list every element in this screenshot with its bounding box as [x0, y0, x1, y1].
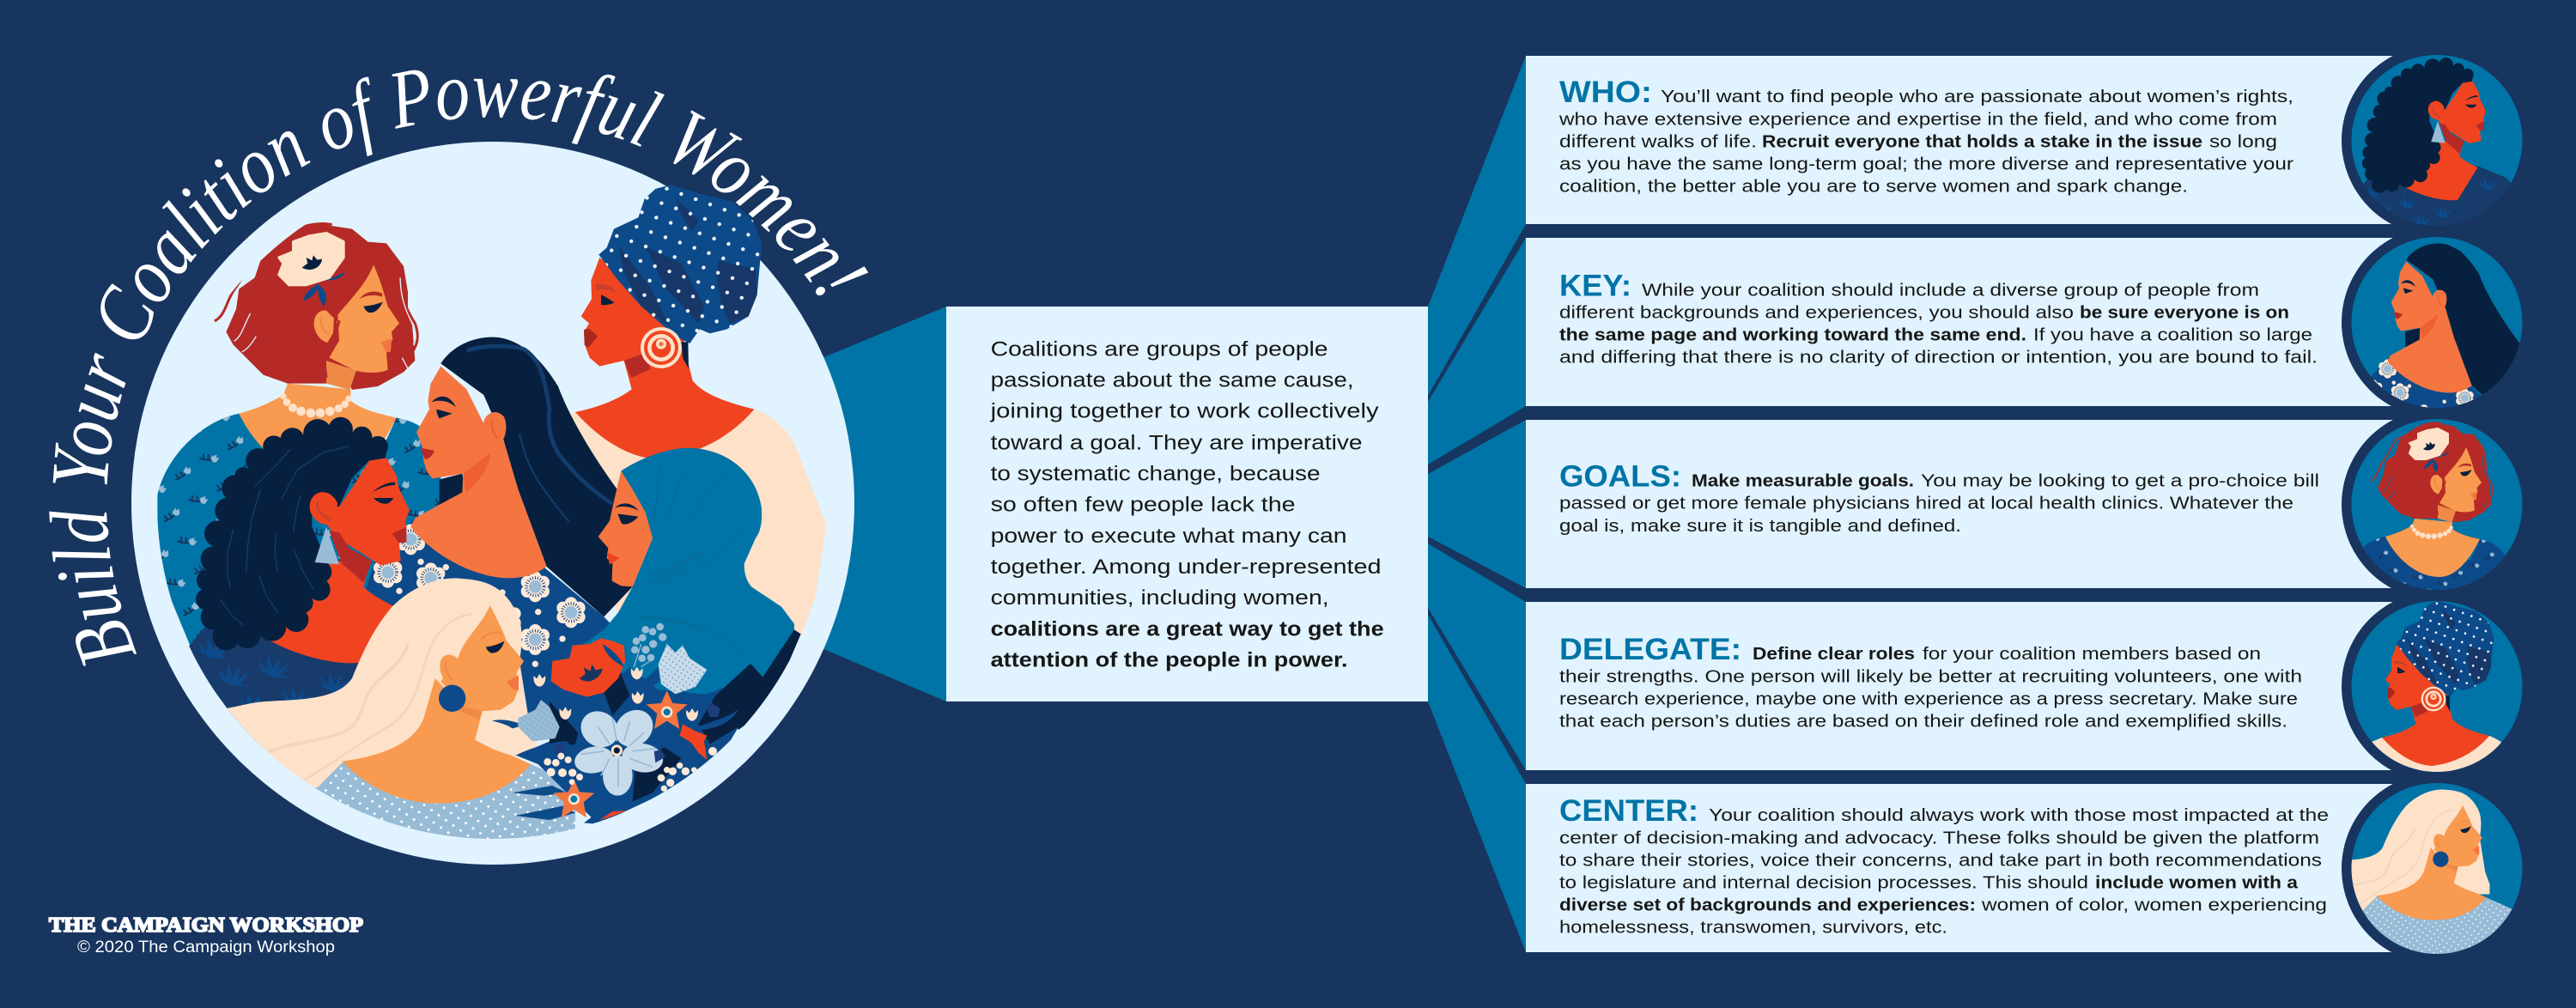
woman with blonde hair — [227, 578, 575, 839]
woman with turban — [558, 185, 826, 635]
intro text box: so often few people lack the — [991, 494, 1296, 517]
panel: CENTER: center of decision-making and advocacy. These folks should be given the platform — [1559, 829, 2319, 847]
small buds — [533, 667, 698, 721]
intro text box: to systematic change, because — [991, 462, 1321, 485]
panel: KEY: and differing that there is no clarity of direction or intention, you are bound to fail. — [1559, 349, 2318, 367]
intro text box: joining together to work collectively — [989, 400, 1379, 423]
intro text box: power to execute what many can — [991, 525, 1347, 548]
panel: DELEGATE: that each person’s duties are based on their defined role and exemplified skills. — [1559, 713, 2287, 732]
intro text box — [946, 307, 1428, 701]
panel: DELEGATE: Define clear roles — [1753, 645, 1915, 664]
panel: WHO: WHO: — [1559, 76, 1652, 109]
panel: WHO: You’ll want to find people who are passionate about women’s rights, — [1661, 88, 2293, 106]
woman in teal hijab — [584, 448, 801, 730]
panel: WHO: coalition, the better able you are to serve women and spark change. — [1559, 177, 2188, 196]
panel: KEY: be sure everyone is on — [2080, 304, 2289, 323]
connector: circle to intro box — [816, 307, 946, 701]
red small flower — [680, 724, 707, 760]
panel: KEY: different backgrounds and experiences, you should also — [1559, 304, 2074, 323]
woman with curly hair — [186, 417, 487, 747]
panel: KEY: If you have a coalition so large — [2033, 326, 2312, 345]
panel: WHO: different walks of life. — [1559, 132, 1757, 151]
panel: CENTER: diverse set of backgrounds and experiences: — [1559, 896, 1976, 915]
portrait: red-haired woman — [2342, 419, 2523, 590]
tulip — [659, 644, 707, 694]
intro text box: toward a goal. They are imperative — [991, 431, 1363, 454]
large pale flower — [574, 709, 663, 796]
panel: DELEGATE: for your coalition members based on — [1923, 645, 2261, 664]
portrait: blonde woman — [2342, 783, 2523, 954]
forget-me-nots — [631, 623, 666, 662]
intro text box: coalitions are a great way to get the — [991, 618, 1384, 641]
intro text box: attention of the people in power. — [991, 649, 1348, 672]
panel: CENTER: Your coalition should always work with those most impacted at the — [1709, 806, 2329, 825]
panel: DELEGATE — [1526, 602, 2397, 770]
panel: CENTER: homelessness, transwomen, survivors, etc. — [1559, 919, 1947, 938]
panel: WHO — [1526, 56, 2397, 224]
panel: GOALS: You may be looking to get a pro-choice bill — [1921, 472, 2319, 491]
panel: GOALS: GOALS: — [1559, 460, 1681, 494]
panel: CENTER: women of color, women experiencing — [1981, 896, 2327, 915]
panel: GOALS — [1526, 420, 2397, 588]
panel: KEY: While your coalition should include a diverse group of people from — [1642, 281, 2259, 300]
panel: WHO: who have extensive experience and expertise in the field, and who come from — [1558, 110, 2277, 129]
panel: GOALS: goal is, make sure it is tangible and defined. — [1559, 517, 1961, 536]
blue sprig — [682, 687, 724, 696]
navy buds — [552, 702, 720, 762]
panel: CENTER: to legislature and internal decision processes. This should — [1559, 873, 2088, 892]
orange star flowers — [553, 690, 688, 817]
logo and copyright — [49, 914, 363, 956]
panel: CENTER: CENTER: — [1559, 794, 1698, 828]
intro text box: together. Among under-represented — [991, 556, 1382, 579]
connector fan: intro box to five panels — [1428, 56, 1526, 952]
panel: DELEGATE: their strengths. One person will likely be better at recruiting volunteers, one with — [1559, 667, 2302, 686]
panel: KEY: KEY: — [1559, 269, 1631, 302]
intro text box: passionate about the same cause, — [991, 369, 1354, 392]
panel: KEY: the same page and working toward the same end. — [1559, 326, 2026, 345]
panel: CENTER: to share their stories, voice their concerns, and take part in both recommendations — [1559, 851, 2322, 870]
panel: WHO: Recruit everyone that holds a stake in the issue — [1762, 132, 2202, 151]
panel: WHO: so long — [2209, 132, 2277, 151]
white blossom clusters — [544, 747, 717, 792]
panel: GOALS: Make measurable goals. — [1692, 472, 1914, 491]
panel: CENTER: include women with a — [2095, 873, 2299, 892]
title on arc: Build Your Coalition of Powerful Women! — [49, 70, 869, 666]
logo and copyright: THE CAMPAIGN WORKSHOP — [49, 914, 363, 937]
panel: DELEGATE: DELEGATE: — [1559, 633, 1741, 666]
woman with red hair — [157, 223, 440, 650]
logo and copyright: © 2020 The Campaign Workshop — [77, 938, 335, 956]
panel: CENTER — [1526, 784, 2397, 952]
woman with long dark hair — [367, 337, 638, 738]
left tulip — [518, 700, 560, 741]
intro text box: communities, including women, — [991, 586, 1329, 610]
poppy — [551, 638, 625, 697]
panel: GOALS: passed or get more female physicians hired at local health clinics. Whatever the — [1559, 495, 2293, 513]
portrait: woman with turban — [2342, 601, 2523, 772]
panel: WHO: as you have the same long-term goal; the more diverse and representative your — [1559, 155, 2293, 173]
portrait: curly-haired woman — [2342, 55, 2523, 226]
intro text box: Coalitions are groups of people — [991, 337, 1328, 361]
portrait: long dark hair woman — [2342, 237, 2523, 408]
flower bouquet — [492, 623, 762, 824]
panel: KEY — [1526, 238, 2397, 406]
illustration circle: coalition of women — [131, 142, 854, 876]
panel: DELEGATE: research experience, maybe one with experience as a press secretary. Make sure — [1559, 689, 2298, 708]
